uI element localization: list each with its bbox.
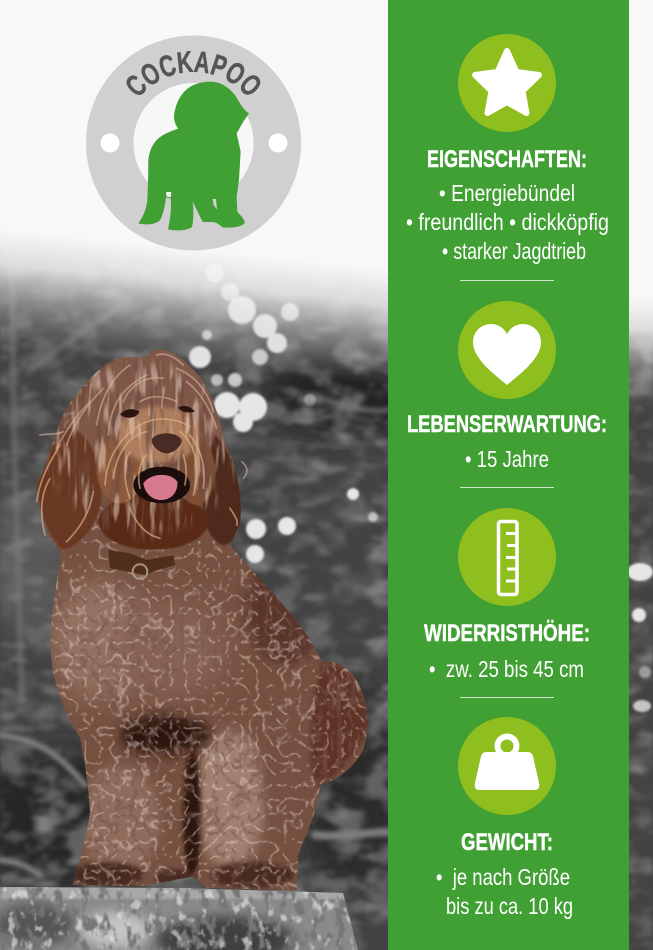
panel: breed facts: [388, 0, 629, 950]
muzzle cheek left: [97, 433, 143, 503]
strands light: [40, 354, 247, 478]
logo: cockapoo badge: [86, 36, 301, 250]
text: weight value: bis zu ca. 10 kg: [446, 893, 573, 919]
tree stump: [0, 885, 360, 950]
nose: [152, 433, 182, 453]
badge dot right: [268, 134, 288, 152]
tail hair streaks: [318, 663, 366, 780]
ear right: [202, 435, 243, 545]
icon: heart: [458, 301, 556, 399]
badge inner disc: [134, 83, 254, 203]
icon: weight: [458, 717, 556, 815]
dog head: [37, 348, 243, 550]
strands tan: [37, 419, 237, 542]
collar: [108, 550, 175, 575]
tongue: [143, 475, 177, 500]
eye right: [178, 406, 195, 412]
text: weight value: [436, 864, 573, 919]
icon: star: [458, 34, 556, 132]
photo: brown curly dog: [30, 340, 380, 900]
text: life expectancy value: • 15 Jahre: [465, 446, 549, 472]
muzzle bridge: [117, 407, 200, 463]
mouth: [133, 467, 190, 503]
ear left: [37, 428, 102, 550]
heading: characteristics: EIGENSCHAFTEN:: [427, 146, 587, 173]
dog coat base: [30, 340, 380, 900]
head crown: [60, 348, 223, 455]
badge title: COCKAPOO: [126, 50, 260, 95]
collar buckle: [133, 564, 147, 579]
icon: ruler: [458, 508, 556, 606]
text: weight value: • je nach Größe: [436, 864, 570, 890]
dog face: [37, 354, 247, 579]
text: shoulder height value: • zw. 25 bis 45 cm: [429, 656, 584, 682]
heading: shoulder height: WIDERRISTHÖHE:: [424, 620, 590, 647]
text: characteristics list: • starker Jagdtrieb: [442, 238, 586, 264]
tail: [310, 660, 370, 788]
muzzle cheek right: [178, 438, 215, 505]
bokeh highlights: [189, 264, 653, 712]
curly fur texture: [30, 340, 380, 900]
text: characteristics list: • freundlich • dickköpfig: [406, 209, 609, 235]
text: characteristics list: • Energiebündel: [439, 180, 575, 206]
heading: weight: GEWICHT:: [461, 829, 553, 856]
eye left: [120, 409, 139, 418]
badge ring: [86, 35, 301, 250]
icon: dog silhouette: [138, 82, 249, 230]
text: characteristics list: [406, 180, 609, 264]
coat shading: [50, 555, 325, 888]
head hair streaks: [46, 358, 236, 541]
badge dot left: [100, 134, 120, 152]
beard: [98, 493, 208, 550]
